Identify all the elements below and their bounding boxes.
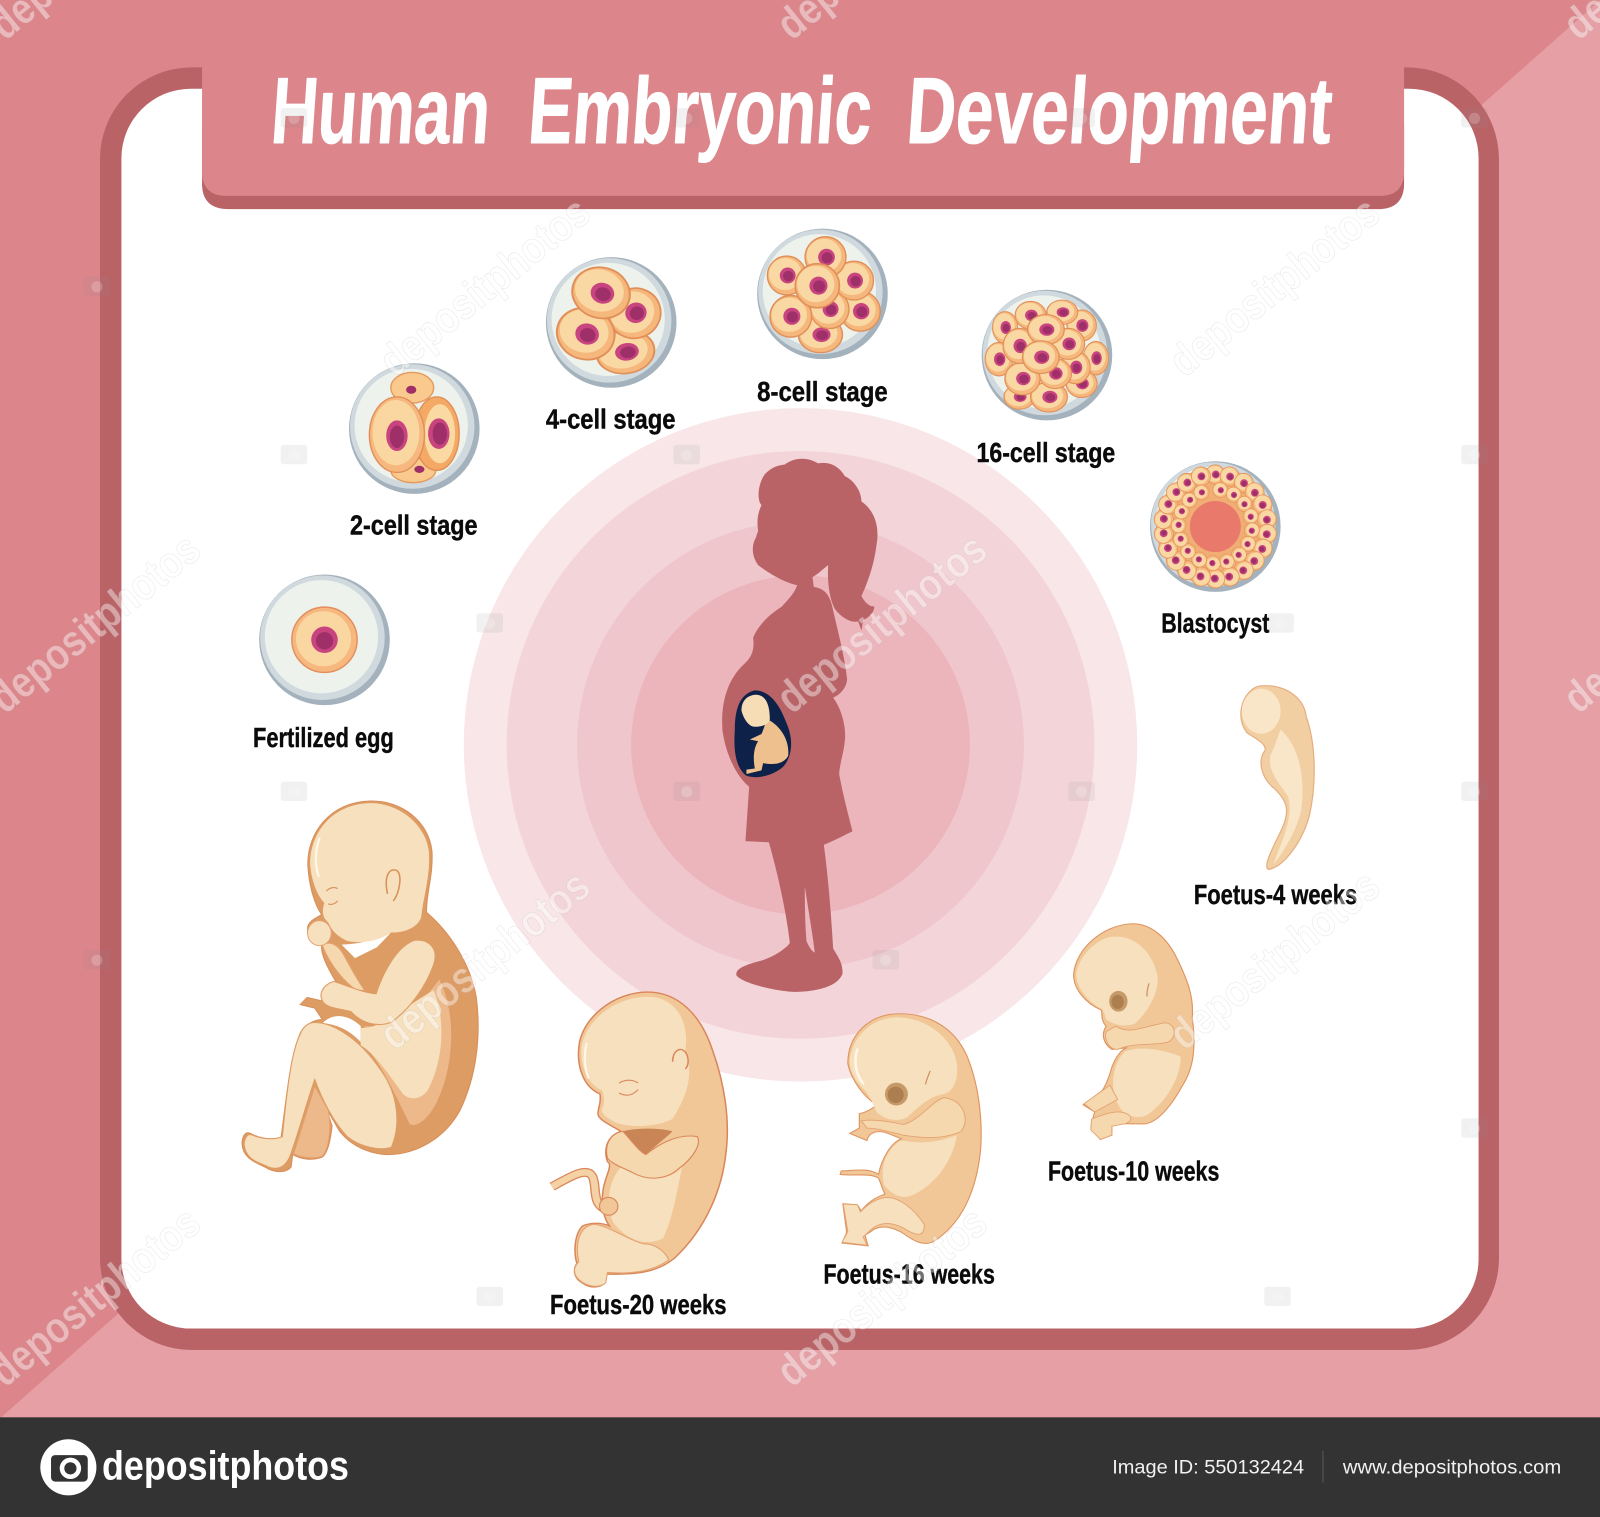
- watermarks: depositphotos: [1160, 187, 1389, 386]
- womb with foetus: [734, 690, 791, 777]
- cell: blastocyst: [1150, 461, 1281, 592]
- label: 4-cell stage: 4-cell stage: [546, 404, 676, 435]
- label: 2-cell stage: 2-cell stage: [350, 510, 478, 541]
- label: foetus 10 weeks: Foetus-10 weeks: [1048, 1156, 1219, 1187]
- watermarks: depositphotos: [370, 861, 599, 1059]
- label: 16-cell stage: 16-cell stage: [977, 437, 1115, 468]
- cell: fertilized egg: [259, 574, 390, 705]
- foetus: late stage, large: [242, 801, 478, 1172]
- cell: 2-cell stage: [349, 363, 480, 494]
- title banner: [202, 61, 1404, 209]
- cell: 8-cell stage: [757, 229, 888, 359]
- foetus: 20 weeks: [552, 992, 727, 1287]
- label: foetus 20 weeks: Foetus-20 weeks: [550, 1289, 727, 1320]
- website: www.depositphotos.com: [1342, 1456, 1561, 1478]
- cell: 4-cell stage: [546, 257, 677, 388]
- label: fertilized egg: Fertilized egg: [253, 722, 394, 753]
- label: blastocyst: Blastocyst: [1161, 608, 1269, 639]
- watermarks: depositphotos: [1160, 861, 1389, 1059]
- label: 8-cell stage: 8-cell stage: [757, 376, 888, 407]
- watermarks: depositphotos: [767, 524, 996, 723]
- cell: 16-cell stage: [982, 290, 1112, 420]
- logo wordmark: depositphotos: [102, 1443, 349, 1489]
- panel: rounded frame: [100, 67, 1499, 1350]
- title: Human: [268, 58, 494, 163]
- label: foetus 16 weeks: Foetus-16 weeks: [823, 1259, 995, 1290]
- label: foetus 4 weeks: Foetus-4 weeks: [1194, 879, 1357, 910]
- foetus: 16 weeks: [840, 1014, 981, 1246]
- foetus: 4 weeks: [1241, 686, 1314, 869]
- title: Development: [904, 58, 1336, 163]
- title: [268, 58, 1336, 163]
- pregnant woman silhouette: [722, 459, 877, 992]
- watermarks: depositphotos: [767, 1198, 996, 1396]
- footer bar: [0, 1417, 1600, 1517]
- title: Embryonic: [525, 58, 876, 163]
- foetus: 10 weeks: [1074, 924, 1194, 1139]
- watermarks: depositphotos: [370, 187, 599, 386]
- image id: Image ID: 550132424: [1112, 1456, 1304, 1478]
- icon: depositphotos logo: [40, 1439, 96, 1495]
- concentric circles: [464, 408, 1137, 1082]
